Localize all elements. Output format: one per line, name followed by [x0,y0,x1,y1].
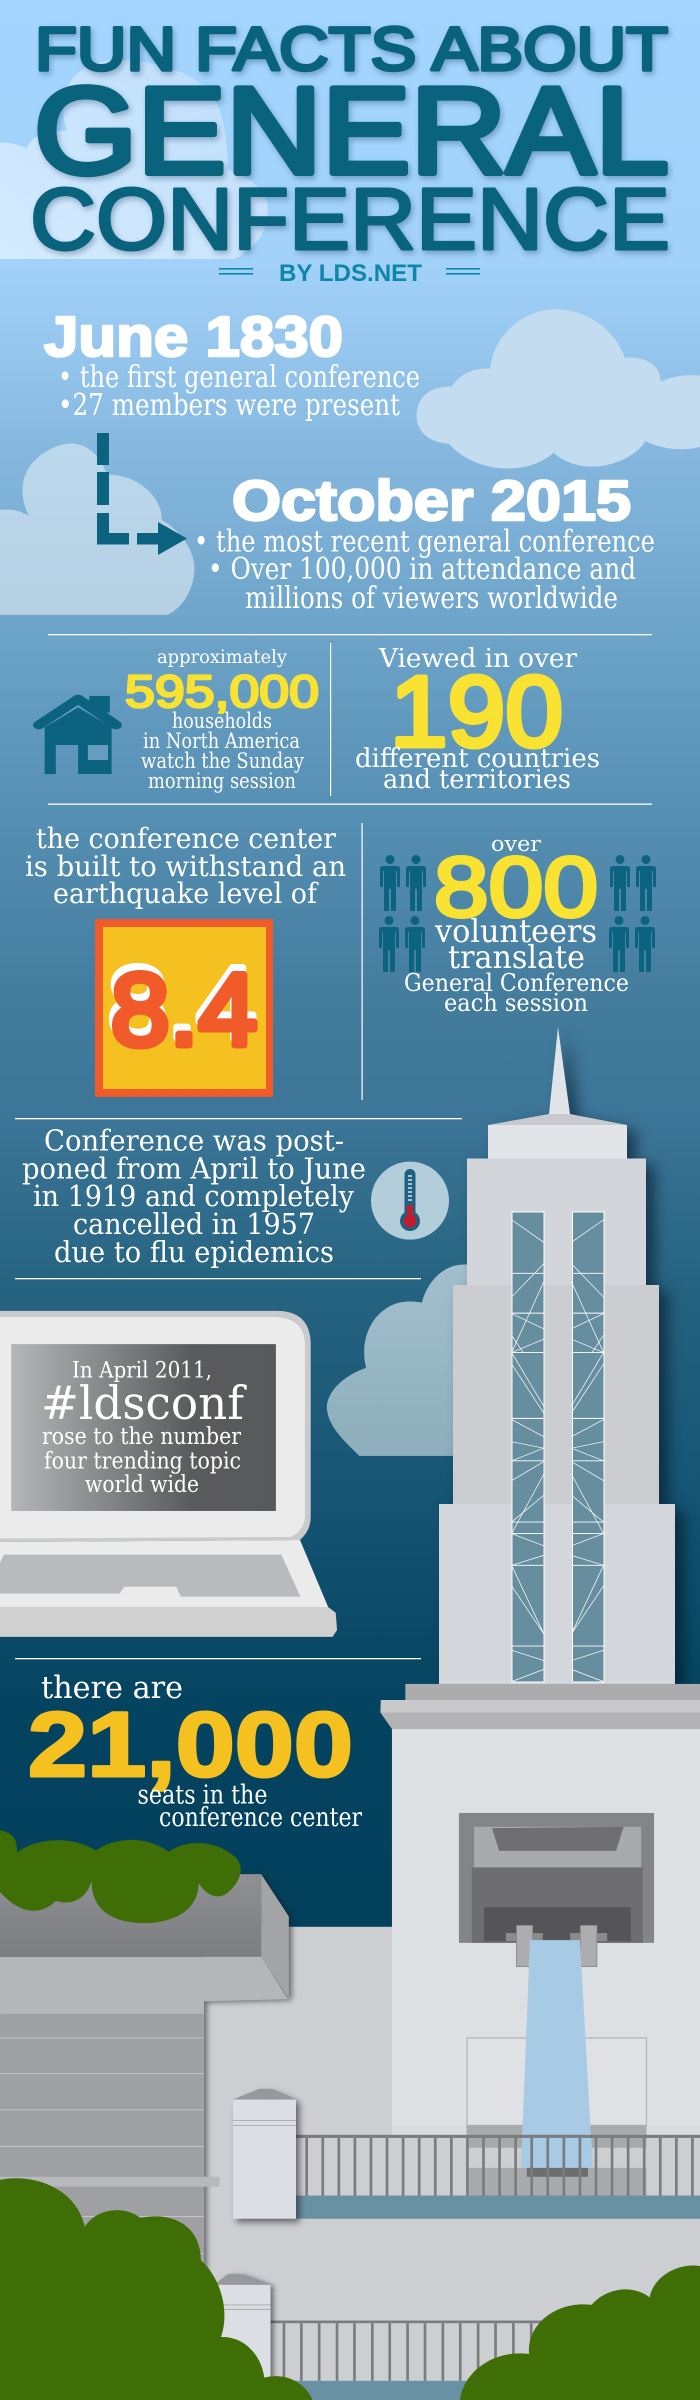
text block: #ldsconf on laptop screen: world wide [85,1472,199,1498]
text block: viewed in 190 countries [355,644,600,795]
text block: 800 volunteers: translate [448,938,585,976]
icon: waterfall [521,1940,593,2168]
text block: 21,000 seats: 21,000 [28,1694,353,1796]
arrow: dashed timeline connector [97,433,187,555]
text block: #ldsconf on laptop screen: four trending topic [44,1448,241,1474]
text block: 21,000 seats: there are [41,1670,183,1706]
icon: pillar lower [214,2274,271,2400]
text block: June 1830: • the first general conference [58,360,420,395]
text block: 800 volunteers: General Conference [404,969,629,997]
text block: earthquake [25,822,346,910]
text block: viewed in 190 countries: 190 [390,656,563,768]
text block: October 2015 [194,469,655,616]
text block: 800 volunteers: volunteers [434,912,597,950]
icon: bush left [0,2178,313,2400]
text block: 595,000 households: in North America [143,729,300,753]
panel: window below fountain [467,2038,646,2196]
text block: flu epidemics [22,1124,366,1269]
text block: #ldsconf on laptop screen: rose to the number [42,1424,241,1450]
text block: #ldsconf on laptop screen [41,1358,247,1498]
icon: bush right [460,2265,700,2400]
icon: laptop [0,1311,337,1637]
text block: 800 volunteers [404,832,629,1017]
title: CONFERENCE [30,171,670,268]
text block: 595,000 households: 595,000 [125,666,319,717]
text block: earthquake: earthquake level of [53,877,320,910]
text block: 21,000 seats: conference center [159,1803,362,1833]
panel: earthquake level 8.4: 8.4 [108,946,256,1060]
text block: 595,000 households: morning session [148,769,296,793]
text block: 595,000 households: households [172,709,272,733]
text block: 595,000 households [125,646,319,793]
icon: hedge on roof [0,1830,241,1923]
cloud: middle behind tower [327,1265,491,1456]
icon: house [39,696,116,774]
text block: June 1830 [44,305,420,423]
text block: flu epidemics: cancelled in 1957 [73,1208,315,1241]
title: FUN FACTS ABOUT [35,15,668,83]
cloud: left [0,443,194,615]
text block: 21,000 seats: seats in the [138,1781,268,1811]
text block: #ldsconf on laptop screen: #ldsconf [41,1376,247,1430]
text block: 595,000 households: approximately [157,646,287,668]
text block: 800 volunteers: 800 [434,840,598,934]
text block: viewed in 190 countries: Viewed in over [378,644,578,674]
byline: by LDS.net: BY LDS.NET [279,260,422,287]
cloud: top left behind title [0,60,268,259]
icon: conference center tower [439,1027,675,1685]
text block: viewed in 190 countries: different countries [355,744,600,774]
panel: earthquake level 8.4: 8.4 [111,953,257,1067]
icon: thermometer [371,1162,449,1240]
text block: 595,000 households: watch the Sunday [141,749,304,773]
text block: 800 volunteers: each session [444,989,588,1017]
text block: flu epidemics: due to flu epidemics [54,1236,334,1269]
text block: flu epidemics: poned from April to June [22,1152,366,1186]
panel: earthquake level 8.4 [95,919,273,1097]
text block: October 2015: millions of viewers worldwide [245,581,618,616]
title [30,15,670,268]
text block: June 1830: June 1830 [44,305,343,369]
panel: conference center building [0,1684,700,2400]
text block: earthquake: is built to withstand an [25,850,346,883]
panel: left roof and wall [0,1874,289,2400]
icon: volunteers people [379,855,656,972]
icon: front railing upper [296,2135,700,2219]
text block: October 2015: October 2015 [232,469,631,533]
text block: earthquake: the conference center [36,822,337,855]
text block: 21,000 seats [28,1670,362,1833]
text block: flu epidemics: Conference was post- [44,1124,344,1158]
text block: viewed in 190 countries: and territories [383,765,571,795]
text block: 800 volunteers: over [491,832,542,856]
icon: front railing lower [271,2321,558,2400]
text block: #ldsconf on laptop screen: In April 2011, [72,1358,212,1384]
title: GENERAL [34,63,669,200]
icon: fountain housing [459,1813,654,1967]
text block: flu epidemics: in 1919 and completely [33,1180,355,1213]
icon: pillar upper [233,2089,297,2219]
text block: June 1830: •27 members were present [58,388,400,423]
cloud: right [417,309,700,469]
